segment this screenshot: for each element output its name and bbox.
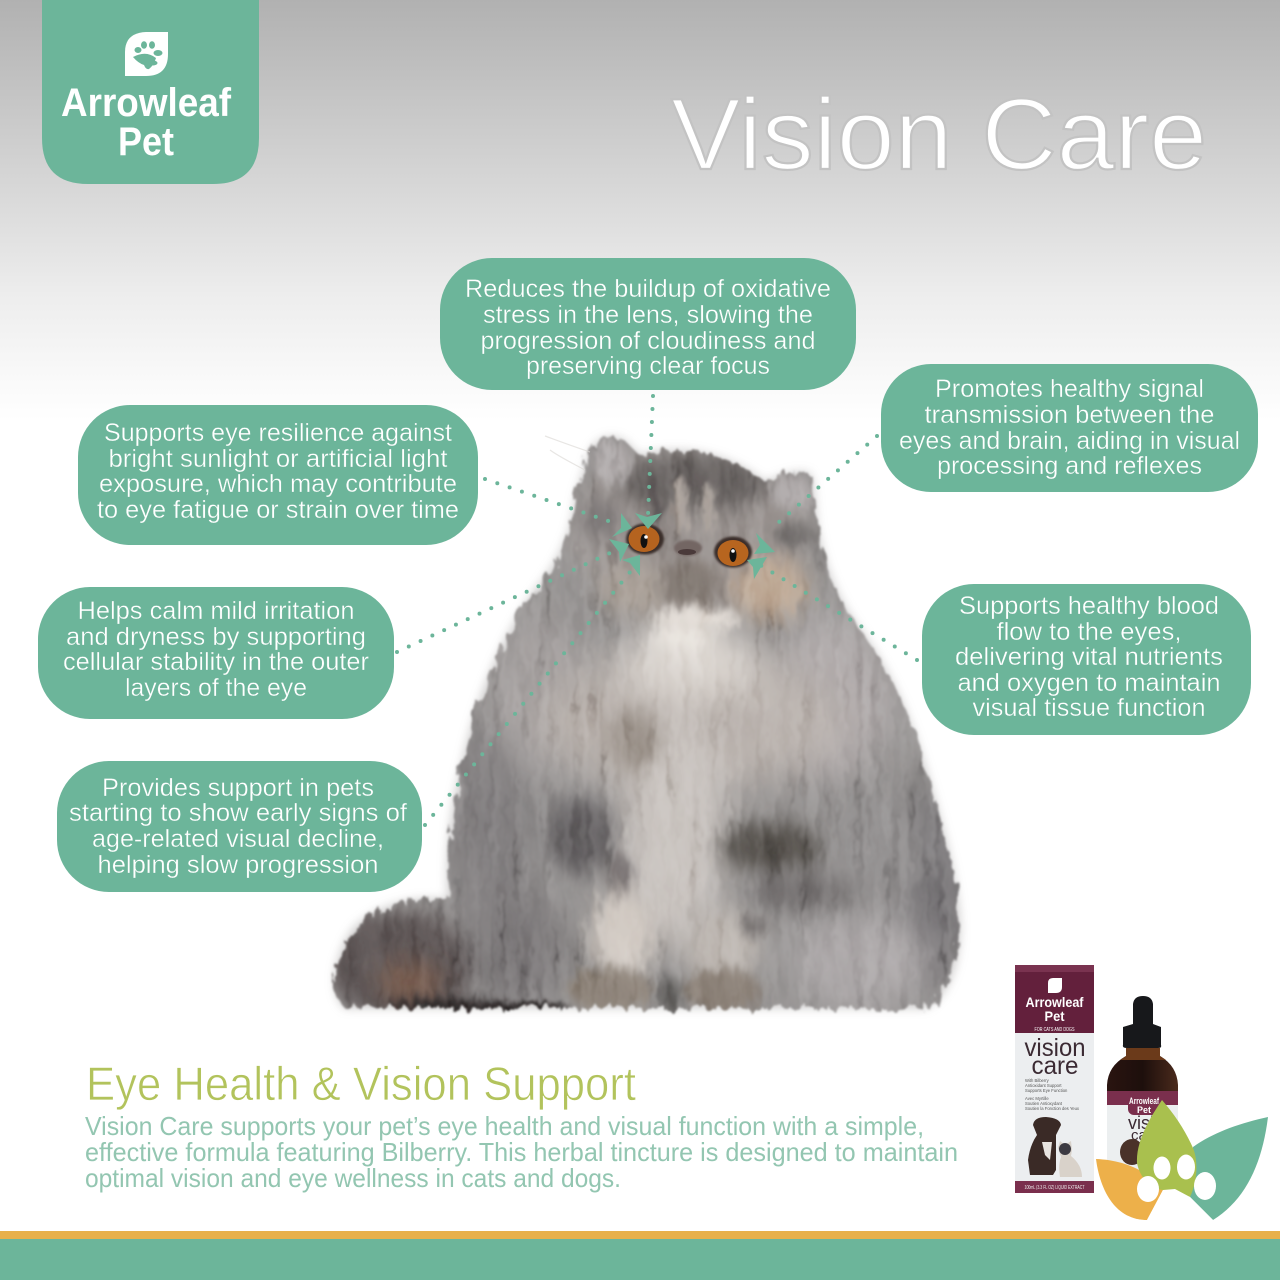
callout: signal transmission: processing and reflexes (937, 452, 1202, 480)
callout: irritation and dryness (38, 587, 394, 719)
cat chest ruff (620, 608, 760, 701)
cat right eye (714, 536, 752, 568)
product bottle (1107, 996, 1178, 1171)
product box: vision (1024, 1034, 1086, 1062)
callout: blood flow: visual tissue function (972, 694, 1206, 722)
product box: Pet (1044, 1008, 1065, 1024)
product box: FOR CATS AND DOGS (1034, 1027, 1075, 1033)
callout: blood flow: and oxygen to maintain (958, 669, 1220, 697)
product box: 100mL (3.3 FL OZ) LIQUID EXTRACT (1024, 1185, 1084, 1191)
logo badge: Pet (118, 120, 174, 164)
section heading: Eye Health & Vision Support (86, 1057, 636, 1110)
product box: Soutien la Fonction des Yeux (1025, 1106, 1080, 1111)
callout: blood flow (922, 584, 1251, 735)
cat dark chest patches (546, 795, 855, 912)
callout: irritation and dryness: cellular stability in the outer (63, 648, 369, 676)
product box: Soutien Antioxydant (1025, 1101, 1063, 1106)
callout: blood flow: flow to the eyes, (996, 618, 1182, 646)
cat left eye (626, 524, 664, 554)
callout: lens oxidative stress: stress in the lens, slowing the (483, 301, 813, 329)
callout: irritation and dryness: Helps calm mild irritation (78, 597, 354, 625)
cat tail (325, 910, 510, 1020)
callout: signal transmission: eyes and brain, aiding in visual (899, 427, 1240, 455)
callout: age-related decline: starting to show early signs of (69, 799, 407, 827)
description paragraph: Vision Care supports your pet’s eye health and visual function with a simple, (85, 1111, 924, 1141)
cat nose (674, 540, 702, 556)
callout: lens oxidative stress: Reduces the buildup of oxidative (465, 275, 831, 303)
cat head (570, 440, 815, 630)
cat photo illustration (320, 420, 980, 1020)
icon: leaf with paw (125, 32, 168, 76)
product box: Arrowleaf (1026, 994, 1084, 1010)
callout: blood flow: Supports healthy blood (959, 592, 1219, 620)
callout: light exposure resilience (78, 405, 478, 545)
description paragraph: effective formula featuring Bilberry. This herbal tincture is designed to maintain (85, 1137, 958, 1167)
logo wordmark: Arrowleaf (61, 81, 232, 125)
product box: care (1032, 1052, 1078, 1080)
callout: lens oxidative stress (440, 258, 856, 390)
product box: With Bilberry (1025, 1078, 1050, 1083)
callout: age-related decline: age-related visual decline, (92, 825, 384, 853)
product bottle: Arrowleaf (1129, 1096, 1160, 1106)
product box (1015, 965, 1094, 1193)
cat soft fur halo (335, 437, 960, 1008)
product bottle: ca (1131, 1127, 1148, 1144)
callout: light exposure resilience: bright sunlight or artificial light (108, 445, 448, 473)
description paragraph (85, 1111, 958, 1193)
product bottle: Pet (1137, 1105, 1151, 1115)
callout: age-related decline: Provides support in pets (102, 774, 374, 802)
title: Vision Care (671, 79, 1207, 191)
product bottle: visi (1128, 1113, 1154, 1133)
callout: signal transmission (881, 364, 1258, 492)
callout: age-related decline: helping slow progression (98, 851, 378, 879)
cat fur streak texture (320, 420, 980, 1020)
callout: signal transmission: Promotes healthy signal (935, 375, 1204, 403)
dog and cat on box (1028, 1117, 1082, 1177)
callout: irritation and dryness: layers of the eye (125, 674, 307, 702)
callout: lens oxidative stress: progression of cloudiness and (480, 327, 816, 355)
callout: signal transmission: transmission between the (924, 401, 1214, 429)
callout: irritation and dryness: and dryness by supporting (66, 623, 366, 651)
cat loose hairs (545, 436, 590, 470)
callout: light exposure resilience: exposure, which may contribute (99, 470, 457, 498)
callout: light exposure resilience: Supports eye resilience against (104, 419, 452, 447)
product box: Supports Eye Function (1025, 1088, 1068, 1093)
page background gradient (0, 0, 1280, 420)
logo badge (42, 0, 259, 184)
dotted connector lines (397, 396, 917, 825)
footer bar (0, 1231, 1280, 1280)
description paragraph: optimal vision and eye wellness in cats and dogs. (85, 1163, 621, 1193)
arrowheads around the eyes (609, 513, 775, 579)
callout: blood flow: delivering vital nutrients (955, 643, 1223, 671)
brand leaves icon (1096, 1100, 1268, 1220)
product box: Antioxidant Support (1025, 1083, 1062, 1088)
callout: age-related decline (57, 761, 422, 892)
callout: lens oxidative stress: preserving clear focus (526, 352, 770, 380)
cat front legs and paws (450, 889, 771, 1013)
product box: Avec Myrtille (1025, 1096, 1049, 1101)
callout: light exposure resilience: to eye fatigue or strain over time (97, 496, 459, 524)
cat body fur (452, 610, 964, 1010)
